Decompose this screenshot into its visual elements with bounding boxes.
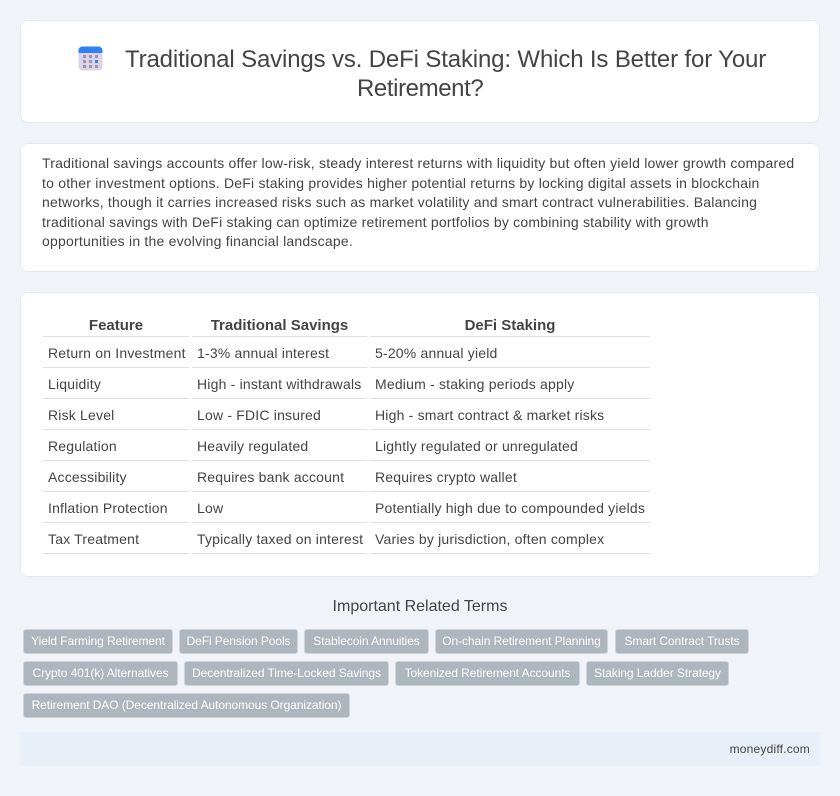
- table row: return on investment: Return on Investment: [48, 345, 186, 361]
- panel: header: [20, 20, 820, 123]
- table row: return on investment: 5-20% annual yield: [375, 345, 498, 361]
- tags: related terms: [23, 629, 749, 718]
- table row: regulation: Regulation: [48, 438, 117, 454]
- tags: related terms: Tokenized Retirement Accounts: [405, 666, 570, 680]
- table row: inflation protection: [48, 500, 645, 516]
- panel: comparison table: [20, 292, 820, 577]
- table row: accessibility: Requires bank account: [197, 469, 344, 485]
- table row: inflation protection: Low: [197, 500, 223, 516]
- table row: return on investment: [48, 345, 498, 361]
- text block: introduction: opportunities in the evolving financial landscape.: [42, 233, 353, 249]
- title: Retirement?: [357, 75, 483, 102]
- table row: regulation: [48, 438, 578, 454]
- table header: Feature: [89, 317, 143, 334]
- table row: accessibility: Requires crypto wallet: [375, 469, 517, 485]
- table row: liquidity: Liquidity: [48, 376, 101, 392]
- table row: tax treatment: Varies by jurisdiction, often complex: [375, 531, 604, 547]
- tags: related terms: Decentralized Time-Locked Savings: [192, 666, 381, 680]
- text block: introduction: Traditional savings accounts offer low-risk, steady interest returns with liquidity but often yield lower growth compared: [42, 155, 794, 171]
- text block: introduction: to other investment options. DeFi staking provides higher potential returns by locking digital assets in blockchain: [42, 174, 760, 190]
- table row: inflation protection: Potentially high due to compounded yields: [375, 500, 645, 516]
- table row: regulation: Lightly regulated or unregulated: [375, 438, 578, 454]
- table row: accessibility: Accessibility: [48, 469, 127, 485]
- tags: related terms: Retirement DAO (Decentralized Autonomous Organization): [32, 698, 341, 712]
- table row: regulation: Heavily regulated: [197, 438, 308, 454]
- table row: tax treatment: Tax Treatment: [48, 531, 139, 547]
- tags: related terms: On-chain Retirement Planning: [442, 634, 601, 648]
- table row: inflation protection: Inflation Protection: [48, 500, 168, 516]
- table row: risk level: Low - FDIC insured: [197, 407, 321, 423]
- heading: important related terms: Important Related Terms: [333, 598, 507, 615]
- table row: return on investment: 1-3% annual interest: [197, 345, 329, 361]
- text block: introduction: traditional savings with DeFi staking can optimize retirement portfolios by combining stability with growth: [42, 214, 709, 230]
- table row: tax treatment: [48, 531, 604, 547]
- tags: related terms: Stablecoin Annuities: [313, 634, 420, 648]
- icon: calendar: [78, 46, 102, 70]
- title: Traditional Savings vs. DeFi Staking: Which Is Better for Your: [125, 46, 766, 73]
- table row: liquidity: [48, 376, 574, 392]
- table row: tax treatment: Typically taxed on interest: [197, 531, 363, 547]
- table row: risk level: Risk Level: [48, 407, 114, 423]
- tags: related terms: Staking Ladder Strategy: [594, 666, 721, 680]
- tags: related terms: DeFi Pension Pools: [187, 634, 290, 648]
- table header: Traditional Savings: [211, 317, 348, 334]
- table row: risk level: High - smart contract & market risks: [375, 407, 604, 423]
- text block: introduction: [42, 155, 794, 249]
- tags: related terms: Yield Farming Retirement: [31, 634, 165, 648]
- table row: accessibility: [48, 469, 517, 485]
- tags: related terms: Smart Contract Trusts: [624, 634, 740, 648]
- panel: introduction: [20, 143, 820, 272]
- title: [125, 46, 766, 102]
- table header: DeFi Staking: [465, 317, 555, 334]
- tags: related terms: Crypto 401(k) Alternatives: [32, 666, 168, 680]
- footer source: moneydiff.com: [730, 742, 810, 756]
- table row: liquidity: High - instant withdrawals: [197, 376, 361, 392]
- footer bar: [20, 732, 820, 766]
- text block: introduction: networks, though it carries increased risks such as market volatility and smart contract vulnerabilities. Balancing: [42, 194, 757, 210]
- table row: liquidity: Medium - staking periods apply: [375, 376, 574, 392]
- table row: risk level: [48, 407, 604, 423]
- table header: [89, 317, 555, 334]
